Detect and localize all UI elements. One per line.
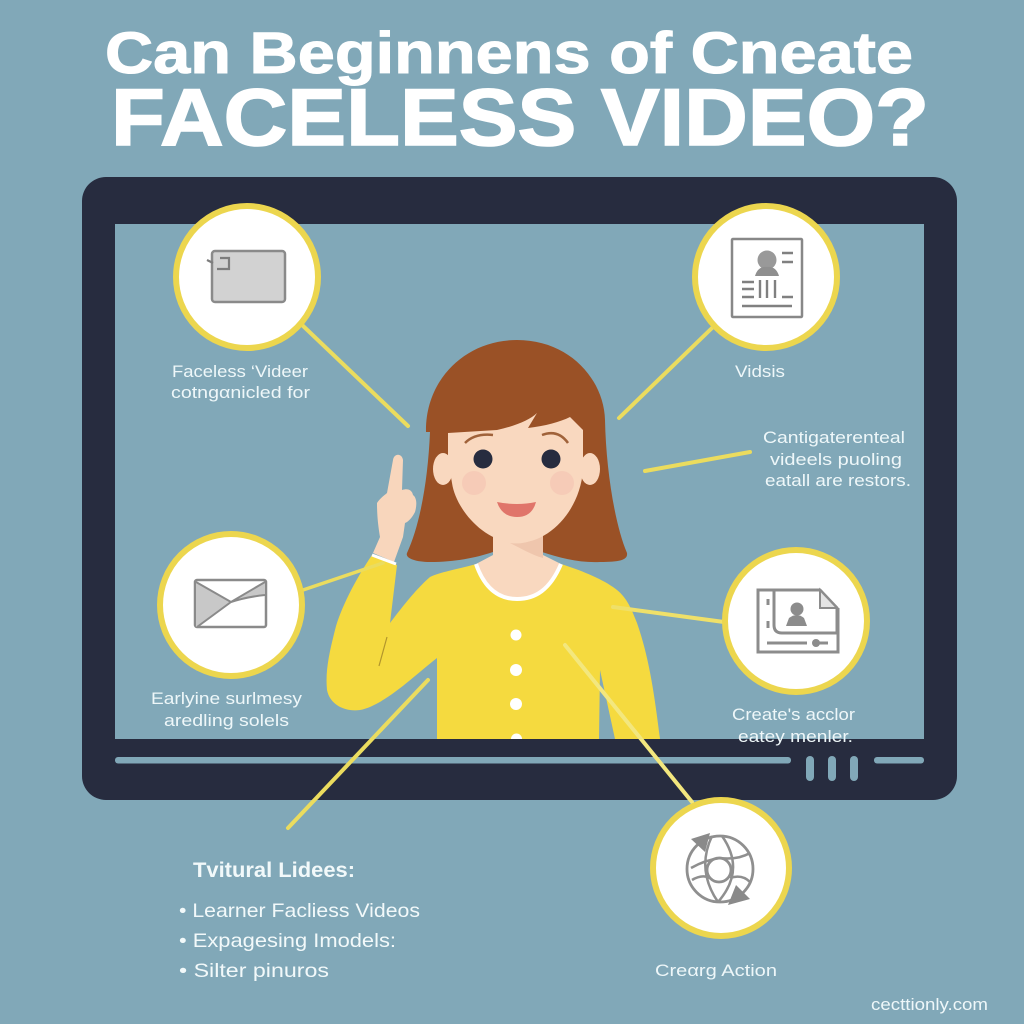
left cheek [462, 471, 486, 495]
title: Can Beginnens of Cneate [105, 21, 913, 86]
character [327, 340, 660, 739]
website credit: cecttionly.com [871, 995, 988, 1014]
connector lines [288, 323, 750, 828]
right cheek [550, 471, 574, 495]
icon circle: globe arrows [653, 800, 789, 936]
brows [465, 433, 568, 443]
face [448, 413, 583, 543]
sleeve crease [379, 637, 387, 666]
monitor frame [82, 177, 957, 800]
icon circle: id card [725, 550, 867, 692]
hair [407, 340, 627, 562]
cuff [372, 555, 396, 564]
monitor control bar [115, 756, 924, 781]
label: right middle [763, 428, 911, 490]
label: top right: Vidsis [735, 363, 785, 381]
label: top left: cotngαnicled for [171, 384, 311, 402]
label: right lower: eatey menler. [738, 728, 853, 746]
bullet list: • Learner Facliess Videos [179, 900, 420, 922]
label: right middle: videels puoling [770, 450, 902, 469]
icon circle: envelope [160, 534, 302, 676]
label: action: Creαrg Action [655, 961, 777, 980]
left ear [433, 453, 453, 485]
label: right middle: eatall are restors. [765, 471, 911, 490]
title [105, 21, 929, 163]
right eye [542, 450, 560, 468]
label: right lower: Create's acclor [732, 706, 856, 724]
label: left lower: aredling solels [164, 711, 289, 730]
label: right lower [732, 706, 856, 746]
label: top left: Faceless ‘Videer [172, 363, 309, 381]
hand [373, 455, 416, 562]
left eye [474, 450, 492, 468]
label: left lower: Earlyine surlmesy [151, 689, 303, 708]
bullet list: • Expagesing Imodels: [179, 930, 396, 952]
label: top left [171, 363, 311, 402]
label: left lower [151, 689, 303, 730]
label: right middle: Cantigaterenteal [763, 428, 905, 447]
buttons [510, 630, 522, 739]
title: FACELESS VIDEO? [111, 73, 929, 163]
icon circle: profile document [695, 206, 837, 348]
right ear [580, 453, 600, 485]
bullet list [179, 859, 420, 982]
neck [476, 530, 561, 599]
icon circle: window [176, 206, 318, 348]
mouth [497, 502, 536, 517]
neck shadow [510, 530, 543, 558]
collar [476, 564, 561, 599]
bullet list: Tvitural Lidees: [193, 859, 355, 882]
sweater [327, 555, 660, 739]
bullet list: • Silter pinuros [179, 960, 329, 982]
